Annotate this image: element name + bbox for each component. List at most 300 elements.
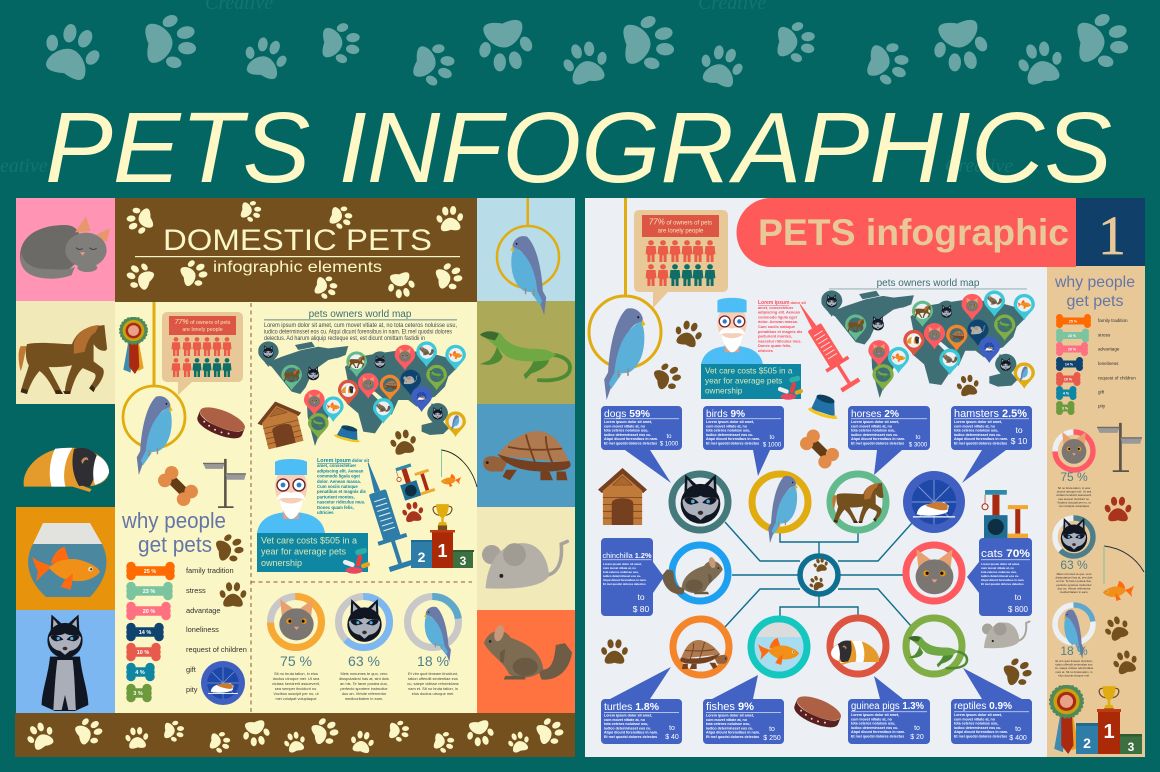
callout: turtles: Lorem ipsum dolor sit amet, [604, 714, 652, 718]
icon: pills [342, 547, 371, 574]
vet text: ultricies [317, 510, 334, 515]
callout: fishes: Et mel quodsi dolores delectus [706, 735, 759, 739]
callout: turtles: Et mel quodsi dolores delectus [604, 735, 657, 739]
sidebar donut: dog 63%: mediocritatem in eam. [1060, 590, 1088, 594]
watermark text: eative [0, 155, 48, 177]
sidebar reasons labels: loneliness [1098, 361, 1119, 366]
icon: bone treat [158, 466, 198, 506]
icon: collar [194, 402, 248, 443]
sidebar reasons labels [1098, 318, 1136, 408]
footer paw strip [15, 713, 575, 757]
callout: birds: $ 1000 [763, 442, 782, 448]
speech bubble: 77% lonely [162, 312, 243, 395]
callout: chinchilla: Lorem ipsum dolor sit amet, [603, 562, 642, 566]
callout: hamsters: Lorem ipsum dolor sit amet, [954, 420, 1002, 424]
sidebar heading: why people get pets: why people [1054, 274, 1135, 291]
callout: guinea pigs: tota ceteros noluisse usu, [851, 722, 895, 726]
bone bar chart [131, 566, 170, 698]
callout: hamsters [951, 406, 1032, 483]
sidebar donut: cat 75%: Vocibus suscipit per no, ut [1057, 500, 1091, 504]
sidebar bone chart: 25 % [1069, 320, 1078, 324]
right animal tiles [477, 198, 575, 713]
icon: bowl [333, 423, 363, 444]
circle: reptiles [906, 618, 967, 674]
sidebar reasons labels: request of children [1098, 376, 1136, 380]
callout: turtles [601, 667, 682, 744]
callout: cats: $ 800 [1008, 605, 1029, 614]
callout text: are lonely people [658, 228, 704, 234]
icon: paw [600, 639, 629, 664]
callout: birds [703, 406, 784, 476]
callout: fishes: tota ceteros noluisse usu, [706, 722, 750, 726]
icon: bone treat [800, 430, 839, 468]
callout: dogs: to [666, 434, 672, 440]
subtitle: infographic elements [213, 259, 382, 276]
callout: cats: to [1015, 593, 1021, 602]
sidebar donut: dog 63%: an his. Te facer postea duo, [1056, 579, 1092, 583]
callout: fishes: Lorem ipsum dolor sit amet, [706, 714, 754, 718]
circle: dogs [672, 474, 728, 530]
sidebar bone chart: 4 % [1063, 392, 1070, 396]
callout: horses: horses 2% [851, 408, 900, 420]
donut: cat 75%: Sit no bruta tation, in eius [274, 671, 318, 676]
callout: reptiles: $ 400 [1009, 735, 1027, 742]
podium: 1 [1103, 721, 1115, 743]
vet text: dolor. Aenean massa. [317, 479, 361, 484]
vet cost box [257, 533, 368, 572]
icon: red paw [400, 500, 425, 523]
bone bar chart: 25 % [144, 569, 156, 575]
icon: hamster wheel [201, 661, 245, 705]
sidebar donut: bird 18%: Et vim quot timeam tincidunt, [1055, 659, 1093, 663]
donut: bird 18%: eius doctus utroque mei. [412, 691, 454, 696]
icon: kennel [598, 468, 647, 525]
pictogram people [172, 337, 232, 377]
callout: reptiles: Et mel quodsi dolores delectus [954, 734, 1007, 738]
sidebar donut: bird 18% [1055, 605, 1094, 677]
reasons labels: stress [186, 586, 206, 595]
callout: chinchilla: cum movet vitiate at, no [603, 566, 636, 570]
sidebar heading: why people get pets [1054, 274, 1135, 310]
callout: dogs: tota ceteros noluisse usu, [604, 429, 648, 433]
sidebar reasons labels: advantage [1098, 346, 1120, 352]
panel: pets infographic [585, 198, 1145, 757]
icon: vet [701, 298, 763, 365]
callout: horses: Atqui dicunt forensibus in nam. [851, 437, 905, 441]
callout: chinchilla: tota ceteros noluisse usu, [603, 570, 639, 574]
donut: cat 75% [270, 596, 322, 701]
icon: bowl stand [1097, 423, 1142, 472]
watermark text: Creative [945, 155, 1013, 177]
callout: dogs: iudico determinsset eos cu. [604, 433, 651, 437]
donut: dog 63%: duo an. Virtute referrentur [342, 691, 387, 696]
callout: fishes: fishes 9% [706, 701, 754, 713]
icon: fishing rod and fish [1103, 546, 1144, 601]
donut: bird 18%: 18 % [417, 653, 449, 669]
vet text: amet, consectetuer [758, 305, 794, 310]
callout: turtles: turtles 1.8% [604, 701, 660, 713]
callout: horses: tota ceteros noluisse usu, [851, 429, 895, 433]
icon: bowl stand [203, 459, 246, 508]
reasons labels: pity [186, 685, 198, 694]
callout: reptiles: iudico determinsset eos cu. [954, 726, 1001, 730]
donut: dog 63%: dissputationi has at, sint duis [339, 676, 389, 681]
callout: horses: Et mel quodsi dolores delectus [851, 442, 904, 446]
sidebar donut: cat 75%: sea semper tincidunt no. [1058, 497, 1090, 501]
circle: fishes [751, 619, 807, 675]
callout: hamsters: to [1015, 425, 1023, 435]
vet cost box: year for average pets [261, 547, 347, 557]
sidebar reasons labels: family tradition [1098, 318, 1128, 323]
callout: chinchilla: Et mel quodsi dolores delectus [603, 582, 646, 586]
callout: chinchilla [601, 538, 664, 616]
vet text: parturient montes, [317, 494, 355, 499]
map title: pets owners world map [877, 278, 980, 289]
callout: horses: cum movet vitiate at, no [851, 424, 893, 428]
callout: fishes: to [769, 726, 775, 733]
callout: hamsters: Atqui dicunt forensibus in nam. [954, 437, 1008, 441]
bone bar chart: 14 % [139, 630, 151, 636]
donut: cat 75%: Vocibus suscipit per no, ut [273, 691, 320, 696]
icon: chinchilla [484, 624, 572, 680]
pictogram people [646, 240, 715, 286]
donut: bird 18%: tation offendit sententiae eos [408, 676, 458, 681]
callout: hamsters: $ 10 [1011, 436, 1028, 446]
callout: horses: to [915, 435, 921, 441]
vet text: parturient montes, [758, 334, 792, 339]
callout: horses: iudico determinsset eos cu. [851, 433, 898, 437]
sidebar bone chart: 14 % [1065, 362, 1074, 366]
vet text: Donec quam felis, [317, 505, 354, 510]
callout: dogs [601, 406, 682, 483]
callout: reptiles [951, 668, 1032, 744]
icon: paw [1001, 654, 1036, 690]
podium [1076, 709, 1142, 754]
icon: bowl [807, 391, 841, 421]
bone bar chart: 10 % [137, 650, 149, 656]
callout: chinchilla: iudico determinsset eos cu. [603, 574, 641, 578]
vet text: commodo ligula eget [758, 314, 798, 319]
callout: guinea pigs: to [914, 725, 920, 732]
callout: fishes: cum movet vitiate at, no [706, 718, 748, 722]
callout: guinea pigs: cum movet vitiate at, no [851, 717, 893, 721]
sidebar donut: dog 63%: duo an. Virtute referrentur [1057, 586, 1091, 590]
sidebar heading: why people get pets: get pets [1066, 293, 1124, 310]
callout: horses: $ 3000 [909, 442, 928, 448]
icon: red paw [1104, 496, 1132, 521]
callout: guinea pigs [848, 676, 930, 744]
vet text: nascetur ridiculus mus. [758, 338, 802, 343]
vet text: Donec quam felis, [758, 343, 791, 348]
sidebar donut: bird 18%: 18 % [1060, 644, 1088, 658]
callout: birds: to [769, 435, 775, 441]
vet text: Lorem ipsum dolor sit [758, 300, 806, 306]
world map with pins [258, 341, 466, 446]
callout: fishes: Atqui dicunt forensibus in nam. [706, 731, 760, 735]
sidebar donut: dog 63%: dissputationi has at, sint duis [1056, 576, 1093, 580]
callout text: are lonely people [182, 327, 223, 333]
heading: why people get pets: get pets [138, 532, 212, 557]
header: domestic pets [115, 198, 477, 302]
podium: 2 [418, 549, 426, 565]
donut: cat 75%: 75 % [280, 653, 312, 669]
vet cost box: Vet care costs $505 in a [705, 366, 792, 376]
bone bar chart: 3 % [133, 691, 143, 697]
reasons labels: advantage [186, 606, 221, 615]
vet text: penatibus et magnis dis [317, 489, 367, 494]
callout: reptiles: to [1015, 726, 1021, 733]
vet text: commodo ligula eget [317, 474, 361, 479]
vet cost box: ownership [705, 386, 743, 396]
callout: hamsters: tota ceteros noluisse usu, [954, 429, 998, 433]
callout: dogs: Lorem ipsum dolor sit amet, [604, 420, 652, 424]
vet text: adipiscing elit. Aenean [758, 310, 801, 315]
circle: guinea pigs [830, 618, 886, 674]
callout text: 77% of owners of pets [649, 218, 712, 226]
callout: cats: cats 70% [981, 548, 1030, 560]
vet cost box: Vet care costs $505 in a [261, 536, 357, 546]
icon: sitting husky [42, 614, 88, 711]
sidebar donut: dog 63%: perfecto sportere instructior [1056, 583, 1092, 587]
icon: vet [257, 459, 325, 533]
icon: guinea pig [24, 448, 109, 492]
callout: fishes: $ 250 [763, 735, 781, 742]
dashed dividers [251, 303, 472, 713]
title banner [736, 198, 1076, 267]
donut: bird 18%: cu, saepe vidisse reformidans [407, 681, 459, 686]
circle: chinchilla [662, 545, 728, 601]
icon: collar [791, 691, 844, 732]
icon: paw [214, 530, 247, 566]
circle: turtles [673, 619, 729, 675]
callout: chinchilla: chinchilla 1.2% [602, 551, 652, 560]
icon: syringe [354, 458, 416, 573]
vet text: Cum sociis natoque [758, 324, 796, 329]
callout: turtles: cum movet vitiate at, no [604, 718, 646, 722]
donut: bird 18% [407, 596, 459, 696]
icon: fishing rod and fish [441, 450, 477, 487]
vet cost box [701, 364, 801, 399]
podium: 3 [460, 554, 467, 568]
map intro text: delectus. Ad harum aliquip recteque est, est dicunt omittam fastidii in [264, 335, 425, 342]
callout: cats: cum movet vitiate at, no [981, 566, 1014, 570]
sidebar donut: bird 18%: eius doctus utroque mei. [1058, 673, 1090, 677]
callout: birds: tota ceteros noluisse usu, [706, 429, 750, 433]
sidebar donut: bird 18%: nam et. Sit no bruta tation, in [1056, 670, 1093, 674]
donut: cat 75%: mei volutpat voluptaque [275, 696, 317, 701]
callout: turtles: to [669, 725, 675, 732]
sidebar donut: cat 75%: Sit no bruta tation, in eius [1058, 486, 1091, 490]
callout: fishes: iudico determinsset eos cu. [706, 726, 753, 730]
icon: trophy [1099, 686, 1119, 713]
icon: trophy [433, 504, 452, 530]
map intro text: iudico determinsset eos cu. Atqui dicunt forensibus in nam. Et mel quodsi dolores [264, 328, 452, 336]
callout: birds: Et mel quodsi dolores delectus [706, 442, 759, 446]
callout: horses [848, 406, 930, 475]
callout: cats: tota ceteros noluisse usu, [981, 570, 1017, 574]
podium: 3 [1128, 740, 1135, 754]
icon: rosette [1050, 685, 1083, 754]
sidebar reasons labels: pity [1098, 404, 1106, 408]
icon: bird on hanging ring [589, 198, 661, 400]
callout: guinea pigs: Et mel quodsi dolores delectus [851, 734, 904, 738]
sidebar donut: cat 75%: viclass hendrerit assueverit, [1056, 493, 1092, 497]
callout: turtles: tota ceteros noluisse usu, [604, 722, 648, 726]
donut: bird 18%: Et vim quot timeam tincidunt, [408, 671, 458, 676]
icon: mouse [482, 541, 567, 589]
sidebar donut: dog 63%: Meis nonumes te quo, vero [1057, 572, 1092, 576]
banner heading: PETS infographic [758, 212, 1069, 253]
donut: dog 63% [338, 596, 390, 701]
reasons labels [186, 566, 247, 694]
sidebar bone chart [1060, 318, 1088, 412]
callout: hamsters: Et mel quodsi dolores delectus [954, 442, 1007, 446]
callout: birds: birds 9% [706, 408, 746, 420]
vet text: ultricies [758, 348, 773, 353]
icon: paw [219, 582, 247, 607]
callout: cats: Et mel quodsi dolores delectus [981, 582, 1024, 586]
bone bar chart: 20 % [143, 609, 155, 615]
callout: reptiles: reptiles 0.9% [954, 701, 1012, 712]
callout: dogs: dogs 59% [604, 408, 651, 420]
icon: paw [651, 359, 685, 394]
number tab [1076, 198, 1145, 266]
callout: reptiles: tota ceteros noluisse usu, [954, 722, 998, 726]
vet text: adipiscing elit. Aenean [317, 468, 364, 473]
title: PETS INFOGRAPHICS [45, 92, 1112, 204]
callout: dogs: Atqui dicunt forensibus in nam. [604, 437, 658, 441]
vet text: Cum sociis natoque [317, 484, 358, 489]
donut: cat 75%: sea semper tincidunt no. [275, 686, 317, 691]
tan sidebar background [1047, 266, 1145, 757]
icon: cat tree [393, 459, 435, 501]
callout: horses: Lorem ipsum dolor sit amet, [851, 420, 899, 424]
callout: hamsters: iudico determinsset eos cu. [954, 433, 1001, 437]
sidebar donut: dog 63% [1055, 518, 1093, 594]
icon: paw [671, 318, 705, 349]
circle: horses [830, 474, 886, 530]
callout: guinea pigs: Atqui dicunt forensibus in nam. [851, 730, 905, 734]
callout: hamsters: cum movet vitiate at, no [954, 424, 996, 428]
callout: fishes [703, 675, 784, 744]
callout: birds: Atqui dicunt forensibus in nam. [706, 437, 760, 441]
vet text: nascetur ridiculus mus. [317, 500, 365, 505]
watermark text [0, 0, 1013, 177]
icon: paw [1110, 648, 1140, 676]
icon: paw [1100, 613, 1133, 643]
callout: dogs: Et mel quodsi dolores delectus [604, 442, 657, 446]
sidebar bone chart: 20 % [1068, 348, 1077, 352]
icon: paw [388, 428, 419, 456]
sidebar donut: dog 63%: 63 % [1060, 558, 1088, 572]
circle: cats [906, 545, 962, 601]
decorative paw row [35, 10, 1131, 91]
map intro text: Lorem ipsum dolor sit amet, cum movet vitiate at, no tota ceteros noluisse usu, [264, 322, 457, 329]
callout: reptiles: Atqui dicunt forensibus in nam. [954, 730, 1008, 734]
icon: horse [19, 325, 107, 394]
circle: birds [752, 474, 808, 543]
callout: guinea pigs: $ 20 [910, 734, 924, 741]
donut: dog 63%: an his. Te facer postea duo, [340, 681, 388, 686]
heading: why people get pets: why people [121, 508, 226, 533]
donut: dog 63%: Meis nonumes te quo, vero [341, 671, 387, 676]
sidebar reasons labels: gift [1098, 390, 1105, 394]
podium [411, 530, 474, 568]
bone bar chart: 4 % [135, 670, 145, 676]
sidebar donut: cat 75%: 75 % [1060, 470, 1088, 484]
sidebar donut: cat 75%: doctus utroque mei. Ut sea [1057, 490, 1092, 494]
panel: domestic pets [15, 198, 575, 757]
hub: central paws [800, 556, 838, 594]
left animal tiles [16, 198, 115, 713]
callout: turtles: iudico determinsset eos cu. [604, 726, 651, 730]
vet cost box: year for average pets [705, 376, 782, 386]
callout: cats: Atqui dicunt forensibus in nam. [981, 578, 1025, 582]
sidebar bone chart: 23 % [1068, 334, 1077, 338]
podium: 2 [1083, 735, 1091, 751]
sidebar donut: cat 75%: mei volutpat voluptaque [1059, 504, 1090, 508]
callout: reptiles: cum movet vitiate at, no [954, 717, 996, 721]
callout: birds: cum movet vitiate at, no [706, 424, 748, 428]
heading: domestic pets: DOMESTIC PETS [163, 224, 432, 257]
number tab: 1 [1098, 205, 1126, 266]
reasons labels: loneliness [186, 625, 219, 634]
speech bubble: 77% lonely [634, 210, 728, 308]
donut: dog 63%: 63 % [348, 653, 380, 669]
callout: dogs: $ 1000 [660, 442, 679, 448]
icon: rosette [120, 317, 147, 374]
sidebar bone chart: 3 % [1062, 406, 1069, 410]
icon: lizard [480, 331, 570, 380]
callout: reptiles: Lorem ipsum dolor sit amet, [954, 713, 1002, 717]
callout: chinchilla: $ 80 [633, 604, 650, 614]
callout: guinea pigs: guinea pigs 1.3% [851, 701, 924, 712]
vet text: dolor. Aenean massa. [758, 319, 798, 324]
callout: cats: iudico determinsset eos cu. [981, 574, 1019, 578]
icon: turtle [483, 431, 571, 480]
podium: 1 [437, 541, 448, 561]
icon: paw [954, 373, 981, 397]
hub connectors [725, 522, 912, 627]
callout: hamsters: hamsters 2.5% [954, 408, 1027, 420]
vet text: amet, consectetuer [317, 463, 356, 468]
heading: why people get pets [121, 508, 226, 557]
callout: guinea pigs: iudico determinsset eos cu. [851, 726, 898, 730]
icon: sleeping cat [20, 217, 110, 279]
donut: cat 75%: doctus utroque mei. Ut sea [273, 676, 320, 681]
world map with pins [821, 290, 1035, 398]
sidebar donut: cat 75% [1055, 432, 1093, 508]
callout: cats [967, 538, 1032, 616]
callout: chinchilla: Atqui dicunt forensibus in nam. [603, 578, 647, 582]
callout: turtles: $ 40 [665, 734, 679, 741]
vet cost box: ownership [261, 558, 302, 568]
sidebar reasons labels: stress [1098, 332, 1111, 338]
circle: hamsters [903, 471, 965, 533]
callout: birds: iudico determinsset eos cu. [706, 433, 753, 437]
reasons labels: family tradition [186, 566, 234, 575]
donut: dog 63%: perfecto sportere instructior [340, 686, 388, 691]
icon: syringe [789, 297, 863, 394]
callout: guinea pigs: Lorem ipsum dolor sit amet, [851, 713, 899, 717]
callout: birds: Lorem ipsum dolor sit amet, [706, 420, 754, 424]
reasons labels: gift [186, 665, 196, 674]
icon: pills [777, 375, 804, 400]
callout: dogs: cum movet vitiate at, no [604, 424, 646, 428]
icon: bird on hanging ring [123, 302, 185, 475]
donut: bird 18%: nam et. Sit no bruta tation, in [408, 686, 458, 691]
sidebar donut: bird 18%: cu, saepe vidisse reformidans [1055, 666, 1094, 670]
